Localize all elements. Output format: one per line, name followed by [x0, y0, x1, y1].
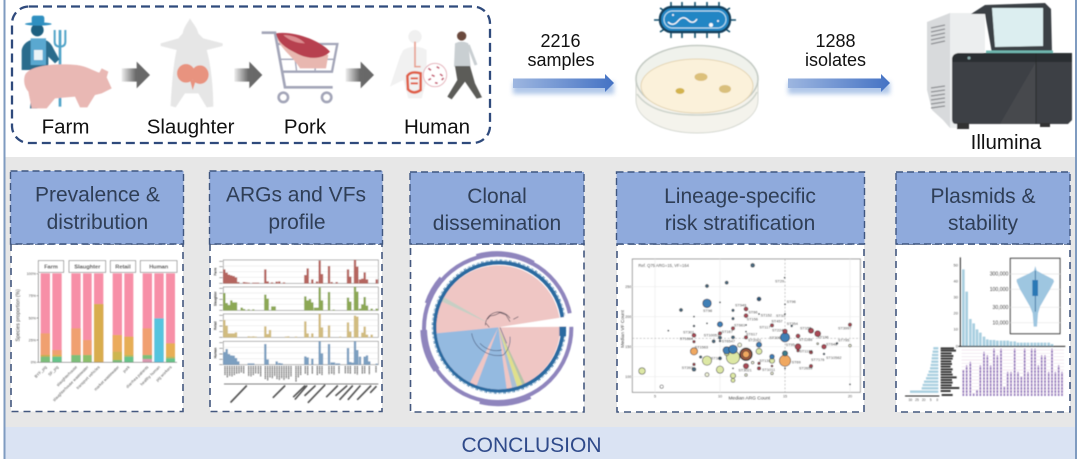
tan bars: Retail: [224, 314, 372, 337]
y axis source labels: Farm: [213, 268, 217, 276]
bubbles: slate lineages: [668, 263, 851, 385]
label: Illumina: Illumina: [971, 131, 1042, 154]
heading: Lineage-specific risk stratification: risk stratification: [665, 212, 815, 235]
panel: prevalence and distribution: [10, 171, 184, 412]
bars: [41, 273, 175, 362]
panel body: [210, 244, 382, 412]
plot frame: [632, 259, 860, 392]
icon: walking person: [447, 31, 482, 99]
icon: farmer: [22, 16, 65, 108]
axis tick labels: 100%: [27, 272, 37, 276]
conclusion heading: CONCLUSION: [461, 434, 602, 457]
intersection bars: [963, 269, 1052, 346]
x axis ticks: 15: [783, 394, 787, 398]
x axis ticks: 5: [654, 394, 656, 398]
sequence type labels: ST96: [787, 300, 796, 304]
icon: pig carcass: [161, 18, 223, 107]
stacked bar chart: species proportion: [15, 261, 177, 402]
violin inset ticks: 300,000: [990, 272, 1008, 278]
sequence type labels: ST117: [759, 326, 770, 330]
x axis sample labels: BYF_pig: [33, 365, 48, 379]
sequence type labels: ST167: [722, 330, 733, 334]
category name marks: [231, 385, 376, 402]
sequence type labels: ST795: [838, 338, 849, 342]
upset plot with violin inset: [905, 257, 1065, 402]
sequence type labels: ST1286: [799, 338, 812, 342]
label: Human: Human: [404, 116, 470, 138]
axis tick labels: 0%: [31, 361, 37, 365]
sequence type labels: ST66: [748, 311, 757, 315]
histogram ticks: 20: [954, 311, 959, 316]
sequence type labels: ST1193: [799, 349, 812, 353]
upset matrix links: [963, 348, 1062, 395]
icon: Illumina sequencer: [927, 3, 1072, 129]
sequence type labels: ST354: [787, 322, 799, 326]
y axis source labels: [213, 268, 217, 358]
sequence type labels: ST617: [746, 333, 757, 337]
sequence type labels: [680, 279, 851, 373]
row frames: [223, 260, 378, 365]
sequence type labels: ST3021: [738, 369, 752, 373]
set size axis: [905, 394, 939, 397]
y axis source labels: Slaughter: [213, 291, 217, 306]
heading: Clonal dissemination: Clonal: [467, 185, 527, 208]
violin inset ticks: 30,000: [993, 305, 1008, 311]
bubbles: red lineages: [692, 307, 852, 370]
bubbles: blue lineages: [703, 297, 790, 359]
arrow: farm to slaughter: [122, 62, 150, 88]
y axis source labels: Human: [213, 348, 217, 358]
icon: pig: [24, 64, 112, 108]
panel: ARGs and VFs profile: [210, 171, 382, 412]
heading: ARGs and VFs profile: ARGs and VFs: [226, 184, 366, 207]
sequence type labels: ST10: [776, 314, 785, 318]
sequence type labels: ST16: [711, 357, 720, 361]
dashed box: sampling chain: [12, 6, 490, 143]
y axis ticks: 100: [625, 375, 631, 379]
blue noise ring: [433, 261, 565, 393]
arrow: samples to culture: [513, 74, 614, 94]
sequence type labels: ST2001: [748, 339, 761, 343]
heading box: clonal dissemination: [410, 172, 584, 244]
sequence type labels: ST152: [761, 313, 772, 317]
outer frame left edge: [4, 0, 6, 459]
violin inset ticks: [990, 272, 1008, 326]
ring end at wedge: [559, 327, 566, 336]
icon: petri dish with colonies: [636, 46, 758, 133]
heading box: ARGs and VFs: [210, 171, 382, 244]
sampling chain illustrations: [22, 16, 482, 108]
inner tree branches: [472, 312, 518, 356]
histogram ticks: 10: [954, 327, 959, 332]
panel: clonal dissemination: [405, 172, 584, 419]
set size ticks: 30: [908, 398, 912, 402]
y axis ticks: [625, 285, 631, 379]
y axis ticks: 200: [625, 315, 631, 319]
panel: plasmids and stability: [896, 172, 1070, 412]
icon: human digestive tract and microbes: [390, 30, 447, 98]
bubbles: light lineages: [639, 343, 851, 388]
sequence type labels: ST7176: [811, 358, 824, 362]
y axis source labels: Retail: [213, 321, 217, 330]
gene name marks: [225, 366, 376, 382]
panel body: [896, 244, 1070, 412]
replicon name marks: [941, 348, 959, 395]
x axis sample labels: transport vehicles: [75, 365, 101, 390]
icon: bacterium: [654, 2, 736, 38]
sequence type labels: ST648: [826, 342, 837, 346]
label: Farm: Farm: [42, 116, 89, 138]
x axis sample labels: SF_pig: [47, 365, 59, 377]
heading box: prevalence: [10, 171, 184, 244]
histogram axes: [958, 257, 1065, 347]
set size ticks: 5: [930, 398, 932, 402]
sequence type labels: ST301: [683, 331, 694, 335]
heading: Clonal dissemination: dissemination: [433, 212, 561, 235]
heading: Plasmids & stability: Plasmids &: [930, 185, 1036, 208]
sequence type labels: ST1011: [762, 368, 775, 372]
axis tick labels: 25%: [29, 338, 37, 342]
set size ticks: 25: [915, 398, 919, 402]
label: 1288 isolates: 1288: [815, 31, 856, 51]
outer frame right edge: [1075, 0, 1077, 459]
green bars: Slaughter: [224, 287, 377, 310]
sequence type labels: ST95: [786, 343, 795, 347]
clade sectors: [436, 264, 560, 390]
label: 1288 isolates: isolates: [805, 50, 866, 70]
sequence type labels: ST10562: [826, 356, 842, 360]
label: Pork: Pork: [284, 116, 327, 138]
panel body: [617, 244, 864, 412]
arrow: pork to human: [346, 62, 374, 88]
sequence type labels: ST6547: [722, 339, 735, 343]
sequence type labels: ST2659: [799, 366, 812, 370]
x axis sample labels: slaughterhouse wastewater: [52, 364, 90, 402]
label: 2216 samples: samples: [527, 50, 595, 70]
sequence type labels: ST1563: [695, 345, 708, 349]
circular phylogenetic tree: [420, 250, 574, 407]
upset matrix dots: [963, 348, 1062, 395]
panel body: [11, 244, 183, 412]
red bars: Farm: [224, 260, 377, 283]
sequence type labels: ST156: [747, 318, 758, 322]
sequence type labels: ST206: [769, 336, 781, 340]
sequence type labels: ST1684: [680, 337, 694, 341]
sequence type labels: ST29: [775, 279, 784, 283]
axis tick labels: 50%: [29, 316, 37, 320]
facet strips: [38, 261, 177, 272]
violin inset ticks: 10,000: [993, 320, 1008, 326]
facet strips: Farm: [44, 265, 58, 271]
y axis title: Species proportion (%): [15, 289, 21, 342]
icon: shopping cart with pork: [262, 33, 337, 102]
x axis sample labels: diarrhea patients: [125, 365, 149, 389]
sequence type labels: ST98: [703, 309, 712, 313]
arrow: slaughter to pork: [234, 62, 262, 88]
section background: conclusion band: [4, 427, 1076, 459]
panel body: [410, 244, 584, 412]
bubble chart: ARG vs VF count by sequence type: [620, 259, 860, 401]
sequence type labels: ST10051: [704, 333, 719, 337]
axis tick labels: 75%: [29, 294, 37, 298]
sequence type labels: ST131: [759, 359, 771, 363]
heading box: plasmids: [896, 172, 1070, 244]
heading: ARGs and VFs profile: profile: [268, 211, 326, 234]
x axis sample labels: market wastewater: [93, 364, 121, 392]
x axis ticks: 10: [718, 394, 722, 398]
category axis: [224, 383, 378, 385]
upset matrix grid: [962, 350, 1064, 393]
facet strips: Slaughter: [74, 265, 101, 271]
axis tick labels: [27, 272, 37, 365]
white wedge gap: [498, 315, 575, 327]
facet strips: Retail: [115, 265, 131, 271]
sequence type labels: ST661: [734, 323, 745, 327]
reference annotation: Ref. Q75 ARG=15, VF=164: [638, 263, 690, 268]
sequence type labels: ST155: [800, 327, 811, 331]
violin inset: [1010, 258, 1060, 334]
outer purple annotation ring: [424, 254, 571, 403]
facet strips: Human: [149, 265, 169, 271]
y axis ticks: 250: [625, 285, 631, 289]
violin inset ticks: 100,000: [990, 287, 1008, 293]
y axis title: Median VF Count: [620, 310, 626, 348]
heading: Prevalence & distribution: Prevalence &: [35, 184, 160, 207]
x axis sample labels: slaughterhouse: [55, 364, 79, 387]
x axis ticks: [654, 394, 852, 398]
heading: Lineage-specific risk stratification: Lineage-specific: [664, 185, 816, 208]
sequence type labels: ST3997: [838, 327, 851, 331]
histogram ticks: 50: [954, 262, 959, 267]
heading box: lineage-specific: [616, 172, 864, 244]
arrow: isolates to sequencing: [788, 74, 890, 94]
sequence type labels: ST69: [792, 360, 801, 364]
x axis ticks: 20: [848, 394, 852, 398]
sequence type labels: ST949: [735, 303, 746, 307]
panel: lineage-specific risk stratification: [616, 172, 864, 412]
gap in outer ring: [560, 312, 580, 327]
bubbles: orange lineages: [690, 348, 791, 366]
set size ticks: 0: [936, 398, 938, 402]
sequence type labels: ST393: [682, 366, 693, 370]
heading: Plasmids & stability: stability: [948, 212, 1019, 235]
histogram ticks: [954, 262, 959, 348]
section background: analysis band: [4, 157, 1076, 427]
blue bars: Human: [224, 341, 377, 365]
replicon set size bars: [910, 348, 938, 392]
x axis sample labels: pig workers: [155, 365, 173, 382]
y axis ticks: 150: [625, 345, 631, 349]
set size ticks: [908, 398, 938, 402]
x axis sample labels: [33, 364, 173, 402]
label: 2216 samples: 2216: [540, 31, 581, 51]
x axis sample labels: healthy human: [139, 365, 161, 387]
sequence type labels: ST224: [772, 329, 784, 333]
axes: [37, 273, 177, 362]
x axis sample labels: pork: [122, 365, 131, 374]
x axis title: Median ARG Count: [729, 395, 771, 401]
heading: Prevalence & distribution: distribution: [47, 211, 148, 234]
label: Slaughter: Slaughter: [147, 116, 235, 138]
histogram ticks: 40: [954, 278, 959, 283]
set size ticks: 20: [922, 398, 926, 402]
histogram ticks: 30: [954, 295, 959, 300]
sequence type labels: ST196: [817, 336, 829, 340]
sequence type labels: ST457: [771, 320, 783, 324]
bar chart: gene profile by source: [213, 260, 378, 402]
histogram ticks: 0: [956, 343, 959, 348]
